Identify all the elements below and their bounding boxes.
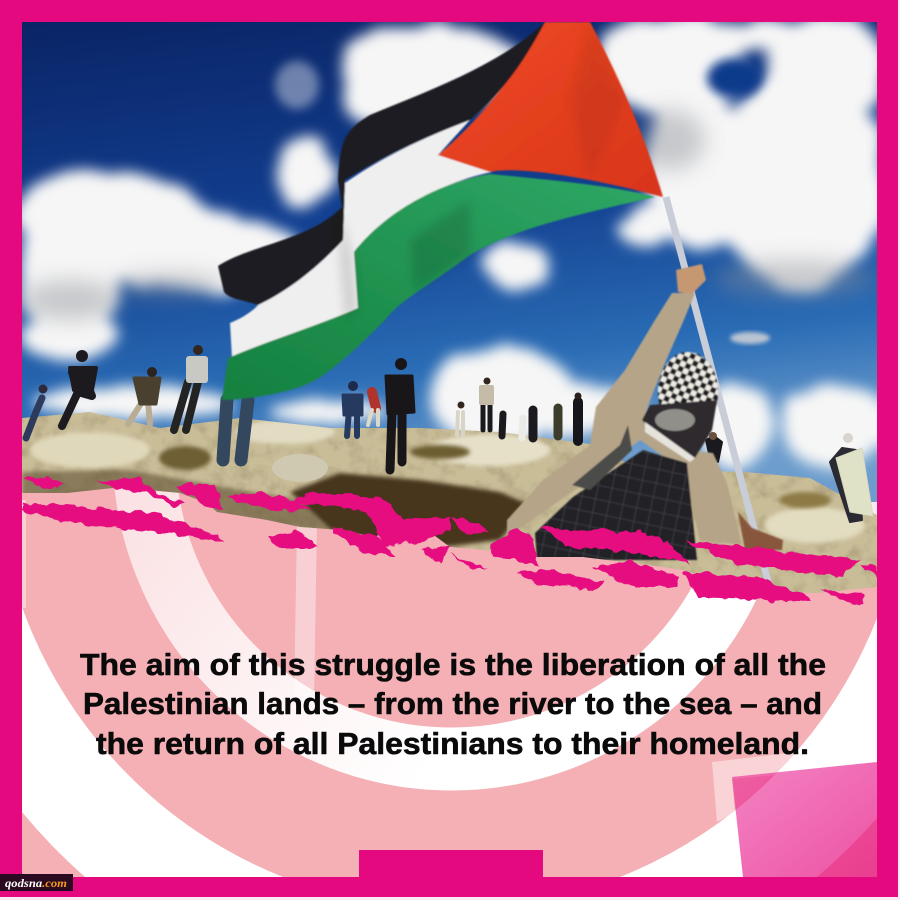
outer white band, left [22,607,283,877]
jacket folds [572,425,632,490]
flag black band [218,22,545,305]
flag fold shading [340,22,625,320]
person 5 [223,400,248,460]
face scarf [642,400,717,458]
photo: flag bearer on hilltop [18,15,890,612]
person 3 [128,402,150,424]
flag white band [230,120,492,358]
lower hand [738,512,783,550]
magenta brush strokes [22,477,877,605]
line 2: Palestinian lands – from the river to the sea – and [83,686,822,721]
person 8 [390,412,402,470]
distant people on the ridge [26,345,873,522]
flag pole [666,197,769,585]
outer white band, right [620,618,877,877]
line 3: the return of all Palestinians to their homeland. [96,726,809,761]
faint vertical strip [294,525,317,700]
light L shape corner [712,752,797,822]
panel background [22,480,877,877]
watermark text: qodsna.com [5,876,67,890]
Palestinian flag [218,22,663,400]
keffiyeh head [657,351,719,406]
person 7 [372,392,376,408]
bottom tab [359,850,543,877]
jacket [507,293,742,545]
clouds [18,15,890,470]
inner white ring [144,452,759,759]
person 6 [347,410,357,436]
translucent magenta quad [732,762,877,877]
person 4 [174,382,198,430]
small ridge people [457,412,463,435]
person behind [706,436,722,462]
flag green band [222,174,655,400]
person 1 [62,370,92,426]
line 1: The aim of this struggle is the liberation of all the [80,647,826,682]
sky [22,22,877,502]
person with sign [830,448,862,522]
shirt [535,450,697,560]
left edge strip [22,500,26,608]
rocky ground [22,412,877,593]
raised hand [676,264,706,294]
person 2 [26,398,42,438]
flag red triangle [438,22,663,197]
person raising flag [507,264,783,560]
watermark: qodsna.com [0,874,73,891]
main statement text [80,647,826,761]
watermark background [0,874,73,891]
lower pink panel with arcs [22,452,877,877]
